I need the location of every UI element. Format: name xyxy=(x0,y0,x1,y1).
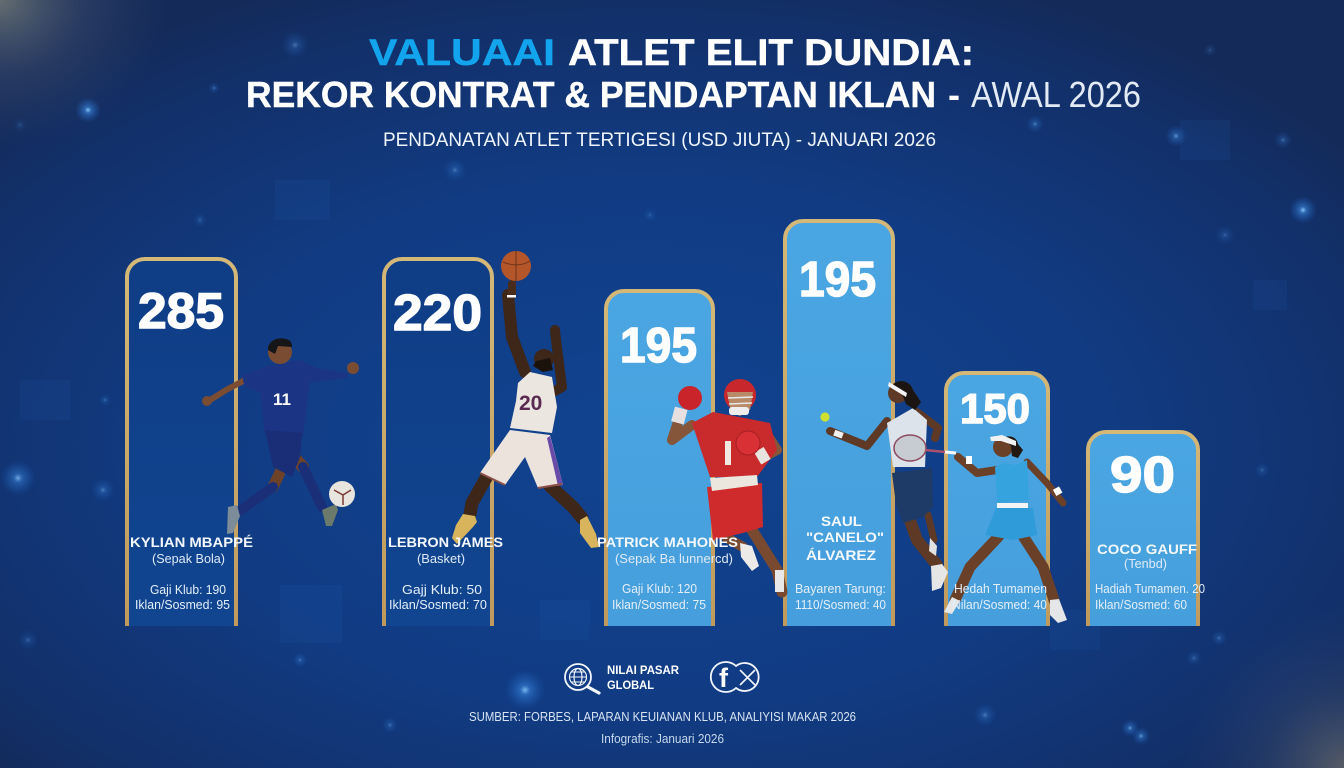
title xyxy=(246,32,1141,115)
bar: Mbappe xyxy=(127,259,236,626)
breakdown: Mbappe xyxy=(135,583,230,612)
bar: Coco Gauff xyxy=(1088,432,1198,626)
athlete: red football player xyxy=(671,379,784,592)
breakdown: Mbappe: Iklan/Sosmed: 95 xyxy=(135,598,230,612)
breakdown: Canelo: 1110/Sosmed: 40 xyxy=(795,598,886,612)
value: 150: 150 xyxy=(960,385,1030,432)
sport: LeBron: (Basket) xyxy=(417,551,465,566)
name: Canelo: ÁLVAREZ xyxy=(806,547,876,563)
value: 195: 195 xyxy=(620,319,697,373)
breakdown: Coco Gauff: Iklan/Sosmed: 60 xyxy=(1095,598,1187,612)
icon: facebook and x: f xyxy=(719,663,729,693)
bar: Canelo xyxy=(785,221,893,626)
bar: LeBron xyxy=(384,259,492,626)
title line 1: VALUAAI xyxy=(369,32,555,73)
breakdown: 150: Hedah Tumamen xyxy=(954,582,1047,596)
date line: Infografis: Januari 2026 xyxy=(601,732,724,746)
name: Patrick Mahones: PATRICK MAHONES xyxy=(597,534,738,550)
sport: Mbappe: (Sepak Bola) xyxy=(152,551,225,566)
panel: Patrick Mahomes xyxy=(597,291,784,626)
panel: Saul Canelo Alvarez xyxy=(785,221,956,626)
brand label xyxy=(607,663,679,692)
icon: globe with magnifier xyxy=(565,664,599,693)
value: 285: 285 xyxy=(138,283,224,339)
athlete: soccer player: 11 xyxy=(273,390,291,409)
breakdown: 150 xyxy=(952,582,1047,612)
name: Canelo xyxy=(806,513,884,563)
breakdown: LeBron: Iklan/Sosmed: 70 xyxy=(389,598,487,612)
source line: SUMBER: FORBES, LAPARAN KEUIANAN KLUB, ANALIYISI MAKAR 2026 xyxy=(469,709,856,724)
name: LeBron James: LEBRON JAMES xyxy=(388,534,503,550)
name: Canelo: "CANELO" xyxy=(806,529,884,545)
name: Canelo: SAUL xyxy=(821,513,862,529)
value: 90: 90 xyxy=(1110,446,1175,503)
value: 220: 220 xyxy=(393,284,482,341)
subtitle: PENDANATAN ATLET TERTIGESI (USD JIUTA) - JANUARI 2026 xyxy=(383,130,936,151)
icon: facebook and x xyxy=(711,662,759,693)
breakdown: LeBron xyxy=(389,583,487,612)
panel: tennis player 150 xyxy=(944,373,1067,626)
name: Coco Gauff: COCO GAUFF xyxy=(1097,541,1197,557)
brand label: NILAI PASAR xyxy=(607,663,679,677)
title line 1 xyxy=(369,32,974,73)
title line 2: AWAL 2026 xyxy=(971,74,1141,115)
panel: Coco Gauff xyxy=(1088,432,1205,626)
breakdown: Mahones: Iklan/Sosmed: 75 xyxy=(612,598,706,612)
athlete: soccer player xyxy=(202,338,359,534)
breakdown: Mahones xyxy=(612,582,706,612)
sport: Coco Gauff: (Tenbd) xyxy=(1124,556,1167,571)
title line 1: ATLET ELIT DUNDIA: xyxy=(568,32,974,73)
bar: 150 xyxy=(946,373,1048,626)
breakdown: Canelo xyxy=(795,582,886,612)
bar: Mahomes xyxy=(606,291,713,626)
breakdown: LeBron: Gajj Klub: 50 xyxy=(402,583,482,597)
panel: Kylian Mbappe xyxy=(127,259,359,626)
athlete: basketball player: 20 xyxy=(519,392,542,415)
breakdown: Mahones: Gaji Klub: 120 xyxy=(622,582,697,596)
breakdown: 150: Nilan/Sosmed: 40 xyxy=(952,598,1047,612)
athlete: basketball player xyxy=(452,251,599,548)
brand label: GLOBAL xyxy=(607,678,654,692)
athlete: tennis player in blue xyxy=(944,435,1067,623)
athlete: tennis player in white xyxy=(820,381,956,591)
breakdown: Coco Gauff xyxy=(1095,582,1205,612)
breakdown: Mbappe: Gaji Klub: 190 xyxy=(150,583,226,597)
sport: Mahones: (Sepak Ba lunnercd) xyxy=(615,551,733,566)
value: 195 tall: 195 xyxy=(799,253,876,307)
name: Kylian Mbappe: KYLIAN MBAPPÉ xyxy=(130,534,253,550)
title line 2: REKOR KONTRAT & PENDAPTAN IKLAN xyxy=(246,74,936,115)
title line 2: - xyxy=(948,74,960,115)
breakdown: Coco Gauff: Hadiah Tumamen. 20 xyxy=(1095,582,1205,596)
panel: LeBron James xyxy=(384,251,599,626)
breakdown: Canelo: Bayaren Tarung: xyxy=(795,582,886,596)
